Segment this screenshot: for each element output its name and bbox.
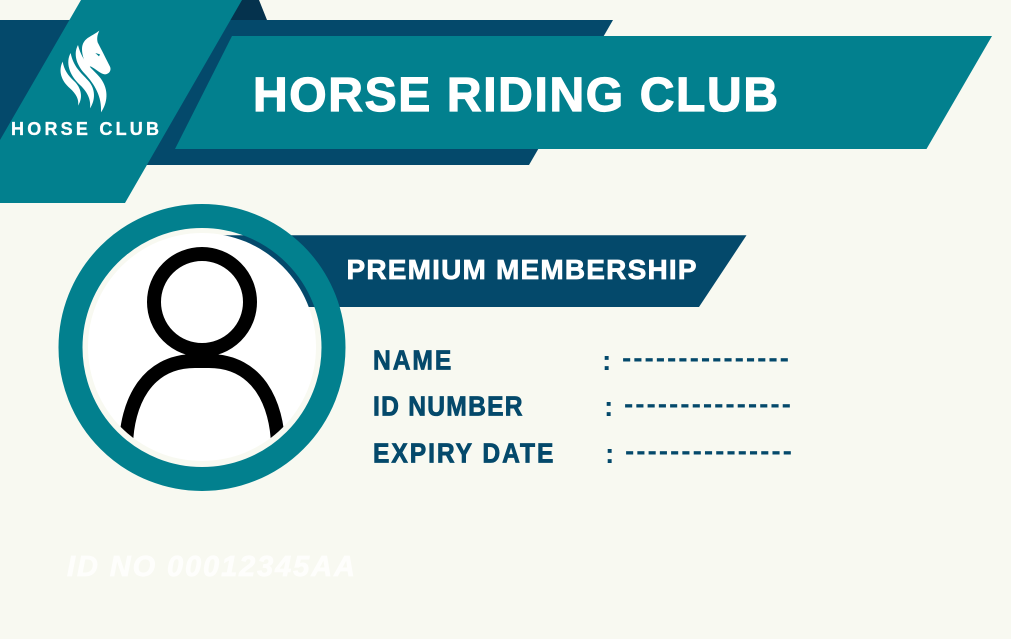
field: expiry date: --------------- bbox=[625, 435, 792, 466]
membership banner bbox=[223, 235, 746, 307]
photo ring bbox=[70, 216, 334, 479]
faint id number watermark: ID NO 00012345AA bbox=[67, 551, 355, 583]
field: expiry date: EXPIRY DATE bbox=[373, 437, 553, 469]
icon: person avatar bbox=[126, 254, 278, 445]
field: id number: --------------- bbox=[624, 388, 791, 419]
field: expiry date bbox=[373, 435, 792, 469]
icon: horse head logo bbox=[61, 31, 111, 112]
title: HORSE RIDING CLUB bbox=[253, 69, 778, 122]
field: expiry date: : bbox=[605, 438, 614, 469]
field: name bbox=[373, 342, 789, 376]
field: name: --------------- bbox=[622, 342, 789, 373]
field: name: : bbox=[602, 345, 611, 376]
field: id number: ID NUMBER bbox=[373, 390, 523, 422]
field: id number bbox=[373, 388, 791, 422]
field: name: NAME bbox=[373, 344, 451, 376]
field: id number: : bbox=[604, 391, 613, 422]
photo white disc bbox=[88, 233, 316, 461]
membership heading: PREMIUM MEMBERSHIP bbox=[346, 254, 696, 285]
photo backing disc bbox=[80, 225, 324, 469]
logo panel bbox=[0, 0, 242, 203]
logo text: HORSE CLUB bbox=[11, 119, 159, 139]
navy back banner bbox=[0, 20, 613, 165]
dark triangle accent bbox=[230, 0, 267, 20]
teal title banner bbox=[175, 36, 992, 149]
